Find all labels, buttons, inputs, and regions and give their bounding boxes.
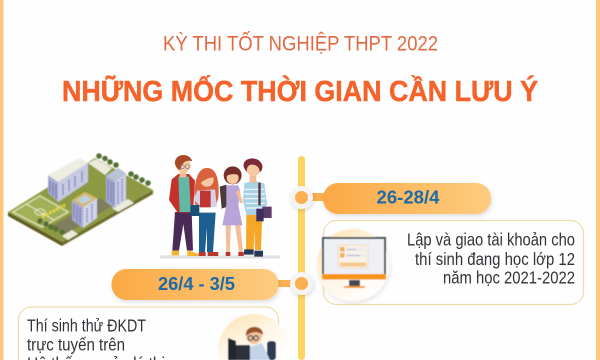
left side bar bbox=[0, 0, 4, 360]
date pill: 26-28/4 bbox=[323, 183, 491, 214]
milestone node 1 bbox=[290, 186, 326, 209]
student 2: red hair and jeans bbox=[190, 168, 219, 256]
date pill: 26/4 - 3/5: 26/4 - 3/5 bbox=[158, 273, 235, 294]
ground shadow bbox=[160, 255, 280, 259]
timeline spine bbox=[298, 156, 305, 360]
title: exam name: KỲ THI TỐT NGHIỆP THPT 2022 bbox=[163, 30, 438, 56]
card text: Thí sinh thử ĐKDT bbox=[27, 316, 146, 336]
card text: năm học 2021-2022 bbox=[443, 268, 575, 288]
card text: trực tuyến trên bbox=[27, 334, 125, 354]
student 1: red jacket bbox=[169, 155, 198, 256]
right side bar bbox=[596, 0, 600, 360]
card: trial online registration bbox=[18, 307, 290, 360]
date pill: 26/4 - 3/5 bbox=[112, 269, 278, 300]
icon: student at computer bbox=[218, 314, 290, 360]
student 3: lavender dress bbox=[220, 166, 244, 256]
milestone node 2 bbox=[277, 272, 313, 295]
heading: milestones: NHỮNG MỐC THỜI GIAN CẦN LƯU Ý bbox=[62, 74, 538, 108]
date pill: 26-28/4: 26-28/4 bbox=[376, 186, 440, 208]
illustration: group of four students bbox=[160, 155, 280, 259]
card text bbox=[27, 316, 165, 360]
icon: login form on monitor bbox=[317, 229, 389, 301]
card text: thí sinh đang học lớp 12 bbox=[415, 249, 575, 269]
card text bbox=[407, 230, 575, 288]
student 4: striped shirt, orange trousers bbox=[243, 158, 272, 257]
illustration: school campus bbox=[8, 153, 153, 246]
card: account creation bbox=[317, 220, 584, 304]
